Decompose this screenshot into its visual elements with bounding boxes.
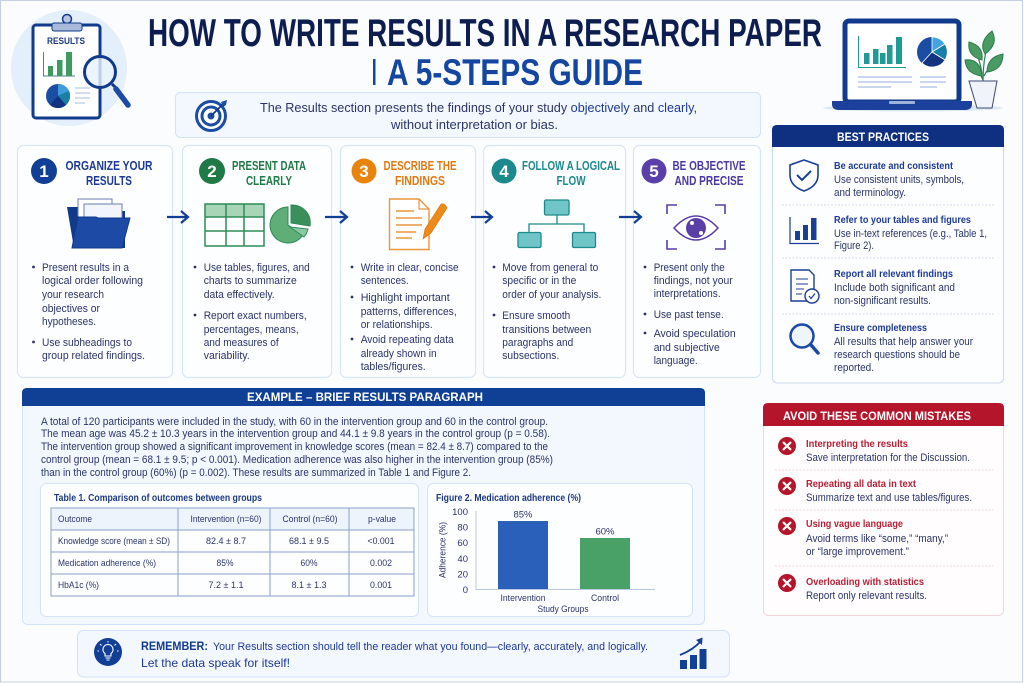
panel: best practices: Use consistent units, symbols,	[834, 174, 964, 186]
panel: best practices: Include both significant and	[834, 282, 955, 294]
panel: avoid these common mistakes: or “large improvement.”	[806, 546, 909, 558]
step 3 panel: describe the findings: patterns, differences,	[361, 306, 457, 318]
intro banner	[176, 92, 760, 138]
step 2 panel: present data clearly	[182, 146, 332, 378]
step 1 panel: organize your results: Present results in a	[42, 262, 130, 274]
step 1 panel: organize your results: group related findings.	[42, 350, 145, 362]
figure card: medication adherence bar chart: 60%	[595, 526, 615, 538]
figure card: medication adherence bar chart: 40	[457, 554, 468, 565]
step 1 panel: organize your results	[18, 146, 172, 378]
example paragraph: than in the control group (60%) (p = 0.002). These results are summarized in Table 1 and Figure 2.	[41, 467, 471, 479]
icon: results clipboard with magnifier: RESULTS	[47, 36, 85, 46]
icon: laptop with charts and plant	[823, 21, 1003, 112]
step 2 panel: present data clearly: Report exact numbers,	[204, 310, 307, 322]
step 5 panel: be objective and precise: 5	[649, 162, 659, 181]
panel: best practices: Use in-text references (e.g., Table 1,	[834, 228, 987, 240]
figure card: medication adherence bar chart: 85%	[513, 510, 533, 520]
step 2 panel: present data clearly: percentages, means,	[204, 324, 299, 336]
step 5 panel: be objective and precise: Present only the	[654, 262, 725, 274]
step 1 panel: organize your results: logical order following	[42, 275, 143, 287]
icon: magnifier	[790, 324, 818, 353]
panel: avoid these common mistakes: Save interpretation for the Discussion.	[806, 452, 970, 464]
table card: comparison of outcomes: 68.1 ± 9.5	[289, 536, 329, 547]
step 1 panel: organize your results: ORGANIZE YOUR	[66, 158, 153, 173]
icon: table and pie	[205, 204, 310, 246]
table card: comparison of outcomes: 7.2 ± 1.1	[208, 580, 244, 591]
remember text	[141, 641, 648, 670]
remember text: Let the data speak for itself!	[141, 656, 290, 670]
step 4 panel: follow a logical flow: transitions between	[502, 324, 591, 336]
step 2 panel: present data clearly: CLEARLY	[246, 173, 292, 188]
figure card: medication adherence bar chart: 20	[457, 570, 468, 580]
step 4 panel: follow a logical flow: 4	[499, 162, 509, 181]
icon: target	[196, 100, 227, 130]
icon: document with pen	[390, 199, 447, 250]
remember banner	[78, 630, 730, 677]
step 4 panel: follow a logical flow: paragraphs and	[502, 337, 573, 349]
figure card: medication adherence bar chart: 100	[452, 507, 468, 518]
step 2 panel: present data clearly: PRESENT DATA	[232, 158, 306, 173]
table card: comparison of outcomes: <0.001	[368, 536, 394, 547]
step 4 panel: follow a logical flow: FLOW	[556, 173, 586, 188]
step 3 panel: describe the findings: sentences.	[361, 275, 409, 287]
table card: comparison of outcomes: Control (n=60)	[282, 514, 338, 525]
panel: best practices: reported.	[834, 362, 874, 374]
icon: light bulb	[94, 638, 122, 666]
intro text	[260, 100, 697, 132]
figure card: medication adherence bar chart: 80	[457, 522, 468, 534]
figure card: medication adherence bar chart: Study Groups	[538, 604, 589, 615]
table card: comparison of outcomes: 0.002	[370, 558, 392, 569]
remember text: Your Results section should tell the reader what you found—clearly, accurately, and logically.	[213, 641, 648, 653]
panel: avoid these common mistakes: Summarize text and use tables/figures.	[806, 492, 972, 504]
table card: comparison of outcomes: Table 1. Comparison of outcomes between groups	[54, 493, 262, 504]
title	[148, 12, 822, 93]
table card: comparison of outcomes: Medication adherence (%)	[58, 558, 156, 569]
figure card: medication adherence bar chart: Intervention	[500, 593, 546, 604]
panel: best practices: Be accurate and consistent	[834, 160, 953, 172]
panel: example brief results paragraph	[22, 388, 705, 624]
icon: error x 3	[778, 517, 796, 535]
icon: folder	[67, 199, 130, 248]
figure card: medication adherence bar chart: Control	[591, 593, 619, 604]
step 3 panel: describe the findings	[340, 146, 476, 378]
table card: comparison of outcomes: 82.4 ± 8.7	[206, 536, 246, 547]
panel: avoid these common mistakes: Using vague language	[806, 518, 903, 530]
panel: avoid these common mistakes: AVOID THESE COMMON MISTAKES	[783, 409, 971, 423]
panel: avoid these common mistakes: Avoid terms like “some,” “many,”	[806, 533, 948, 545]
step 1 panel: organize your results: 1	[39, 162, 49, 181]
icon: flow chart	[518, 200, 596, 248]
panel: best practices: Ensure completeness	[834, 322, 927, 334]
step 3 panel: describe the findings: DESCRIBE THE	[384, 158, 457, 173]
panel: avoid these common mistakes: Repeating all data in text	[806, 478, 916, 490]
table card: comparison of outcomes: 60%	[300, 558, 318, 569]
step 2 panel: present data clearly: data effectively.	[204, 289, 275, 301]
figure card: medication adherence bar chart	[428, 484, 692, 616]
example paragraph: The mean age was 45.2 ± 10.3 years in the intervention group and 44.1 ± 9.8 years in the control group (p = 0.58).	[41, 428, 550, 440]
step 3 panel: describe the findings: 3	[359, 162, 369, 181]
table card: comparison of outcomes: Outcome	[58, 514, 92, 525]
step 5 panel: be objective and precise	[634, 146, 760, 378]
step 4 panel: follow a logical flow: Move from general to	[502, 262, 598, 274]
remember text: REMEMBER:	[141, 641, 208, 653]
step 4 panel: follow a logical flow: order of your analysis.	[502, 289, 601, 301]
figure card: medication adherence bar chart: 0	[463, 585, 468, 596]
step 3 panel: describe the findings: Write in clear, concise	[361, 262, 459, 274]
step 5 panel: be objective and precise: language.	[654, 355, 698, 367]
icon: error x 1	[778, 437, 796, 455]
table card: comparison of outcomes	[40, 484, 418, 616]
arrow 4 to 5	[619, 211, 641, 223]
step 3 panel: describe the findings: FINDINGS	[395, 173, 445, 188]
step 5 panel: be objective and precise: and subjective	[654, 342, 720, 354]
step 2 panel: present data clearly: charts to summarize	[204, 275, 297, 287]
panel: best practices: Report all relevant findings	[834, 268, 953, 280]
table card: comparison of outcomes: 0.001	[370, 580, 392, 591]
panel: example brief results paragraph: EXAMPLE – BRIEF RESULTS PARAGRAPH	[247, 392, 483, 404]
intro text: without interpretation or bias.	[390, 117, 558, 132]
step 1 panel: organize your results: objectives or	[42, 303, 100, 315]
step 3 panel: describe the findings: Avoid repeating data	[361, 334, 455, 346]
step 1 panel: organize your results: hypotheses.	[42, 316, 96, 328]
panel: best practices: Refer to your tables and figures	[834, 214, 971, 226]
panel: best practices: and terminology.	[834, 187, 906, 199]
panel: best practices	[772, 125, 1004, 383]
icon: eye in focus brackets	[667, 205, 725, 249]
step 5 panel: be objective and precise: Use past tense.	[654, 309, 724, 321]
arrow 3 to 4	[471, 211, 492, 223]
step 5 panel: be objective and precise: AND PRECISE	[674, 173, 744, 188]
step 3 panel: describe the findings: or relationships.	[361, 319, 433, 331]
step 4 panel: follow a logical flow: specific or in the	[502, 275, 576, 287]
panel: avoid these common mistakes: Overloading with statistics	[806, 576, 924, 588]
step 2 panel: present data clearly: Use tables, figures, and	[204, 262, 310, 274]
figure card: medication adherence bar chart: Adherence (%)	[438, 522, 448, 578]
panel: best practices: All results that help answer your	[834, 336, 973, 348]
example paragraph: A total of 120 participants were included in the study, with 60 in the intervention group and 60 in the control group.	[41, 416, 548, 428]
step 3 panel: describe the findings: Highlight important	[361, 292, 450, 304]
step 1 panel: organize your results: Use subheadings to	[42, 337, 132, 349]
panel: best practices: non-significant results.	[834, 295, 931, 307]
intro text: The Results section presents the findings of your study objectively and clearly,	[260, 100, 697, 115]
step 5 panel: be objective and precise: BE OBJECTIVE	[672, 158, 746, 173]
table card: comparison of outcomes: 8.1 ± 1.3	[292, 580, 326, 591]
step 4 panel: follow a logical flow: Ensure smooth	[502, 310, 570, 322]
figure card: medication adherence bar chart: Figure 2. Medication adherence (%)	[436, 493, 581, 504]
step 4 panel: follow a logical flow	[484, 146, 626, 378]
table card: comparison of outcomes: p-value	[368, 514, 396, 525]
step 2 panel: present data clearly: 2	[207, 162, 217, 181]
panel: best practices: BEST PRACTICES	[837, 130, 929, 144]
step 5 panel: be objective and precise: findings, not your	[654, 275, 733, 287]
figure card: medication adherence bar chart: 60	[457, 538, 468, 549]
step 3 panel: describe the findings: tables/figures.	[361, 361, 426, 373]
table card: comparison of outcomes: Intervention (n=60)	[190, 514, 262, 525]
icon: shield	[790, 160, 818, 191]
example paragraph: The intervention group showed a significant improvement in knowledge scores (mean = 82.4 ± 8.7) compared to the	[41, 441, 548, 453]
table card: comparison of outcomes: Knowledge score (mean ± SD)	[58, 536, 170, 547]
panel: avoid these common mistakes	[763, 403, 1004, 616]
step 4 panel: follow a logical flow: FOLLOW A LOGICAL	[522, 158, 620, 173]
step 2 panel: present data clearly: and measures of	[204, 337, 280, 349]
step 1 panel: organize your results: your research	[42, 289, 104, 301]
arrow 1 to 2	[167, 211, 188, 223]
step 4 panel: follow a logical flow: subsections.	[502, 350, 559, 362]
icon: rising bar chart	[680, 638, 706, 669]
example paragraph: control group (mean = 68.1 ± 9.5; p < 0.001). Medication adherence was also higher in the intervention group (85%)	[41, 454, 553, 466]
step 3 panel: describe the findings: already shown in	[361, 348, 437, 360]
panel: best practices: Figure 2).	[834, 240, 874, 252]
icon: checked document	[791, 270, 819, 303]
icon: error x 2	[778, 477, 796, 495]
step 5 panel: be objective and precise: Avoid speculation	[654, 328, 736, 340]
icon: bar chart	[790, 217, 819, 244]
step 2 panel: present data clearly: variability.	[204, 350, 250, 362]
panel: avoid these common mistakes: Report only relevant results.	[806, 590, 927, 602]
panel: best practices: research questions should be	[834, 349, 960, 361]
table card: comparison of outcomes: HbA1c (%)	[58, 580, 99, 591]
step 5 panel: be objective and precise: interpretations.	[654, 288, 721, 300]
arrow 2 to 3	[325, 211, 347, 223]
table card: comparison of outcomes: 85%	[216, 558, 234, 569]
panel: avoid these common mistakes: Interpreting the results	[806, 438, 908, 450]
icon: results clipboard with magnifier	[11, 10, 128, 126]
icon: error x 4	[778, 574, 796, 592]
step 1 panel: organize your results: RESULTS	[86, 173, 132, 188]
example paragraph	[41, 416, 553, 479]
title: A 5-STEPS GUIDE	[387, 52, 643, 93]
